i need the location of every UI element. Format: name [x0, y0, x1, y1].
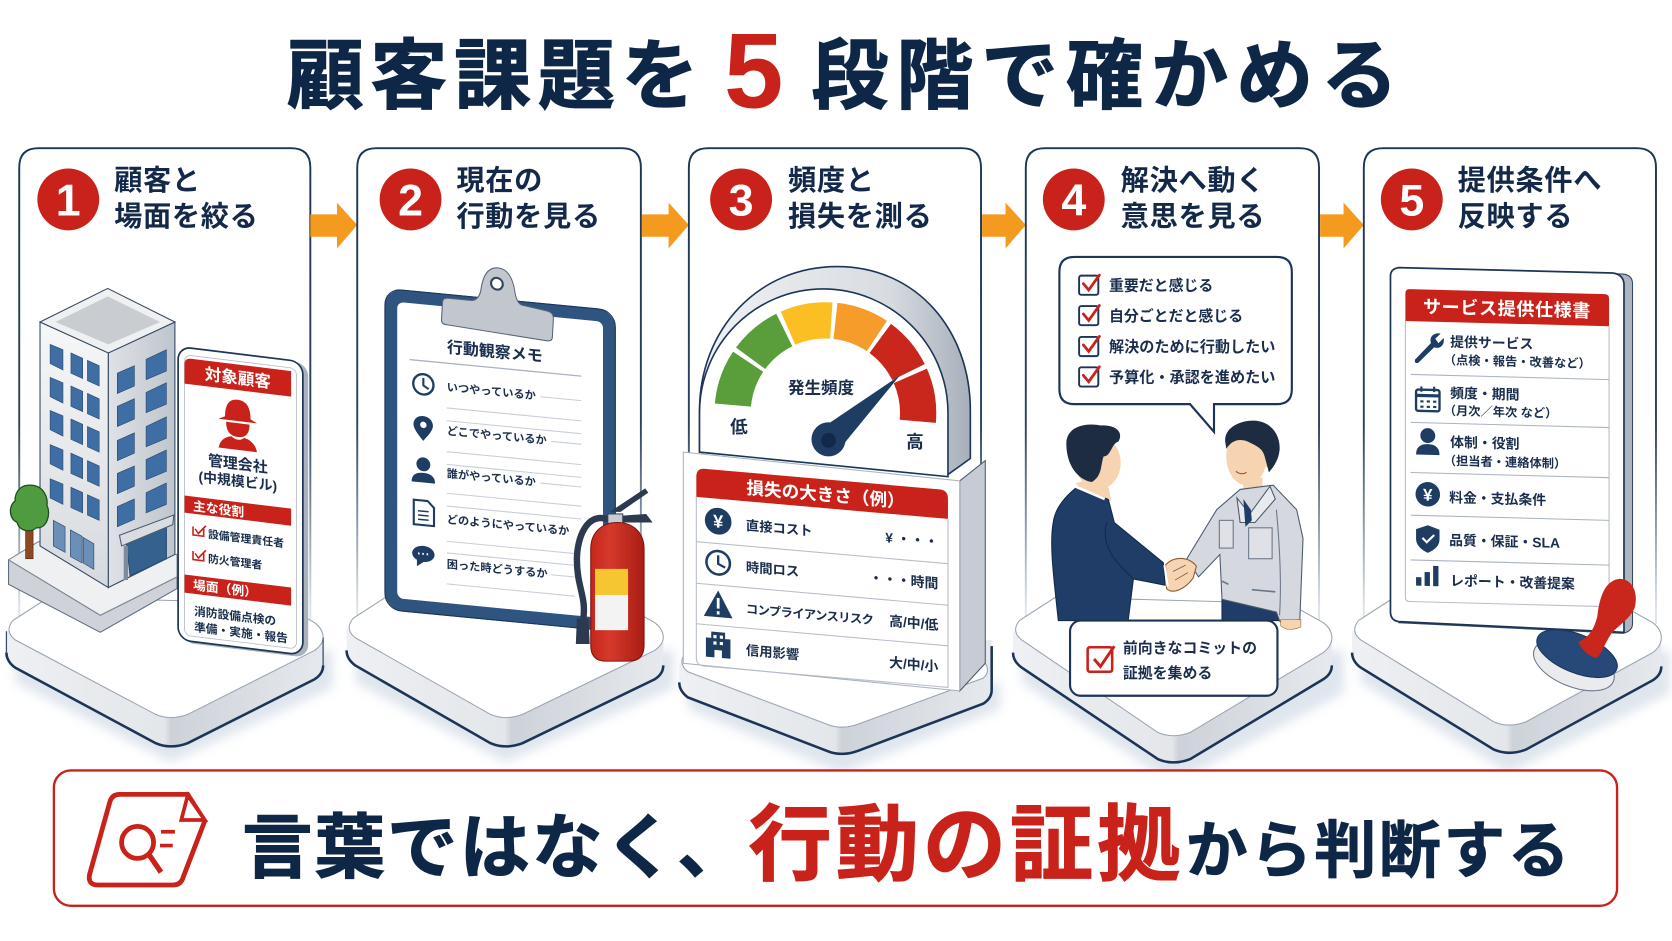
- arrow 4: [1320, 203, 1364, 248]
- gauge: 発生頻度: 低: [730, 417, 748, 437]
- card: 対象顧客: 防火管理者: [208, 551, 262, 572]
- heading 1: 場面を絞る: [114, 200, 259, 232]
- row: 料金・支払条件: ¥: [1423, 486, 1433, 505]
- row: 体制・役割: 体制・役割: [1450, 434, 1519, 452]
- row: 直接コスト: 直接コスト: [746, 517, 813, 539]
- heading 4: [1121, 164, 1265, 232]
- row: 料金・支払条件: 料金・支払条件: [1449, 489, 1546, 508]
- spec sheet: サービス提供仕様書: [1423, 296, 1590, 321]
- row: 信用影響: [706, 631, 938, 677]
- banner: bottom message: 言葉ではなく、: [242, 808, 747, 887]
- row: どのように: [414, 500, 575, 565]
- gauge: 発生頻度: 高: [906, 432, 924, 452]
- row: コンプライアンスリスク: [704, 589, 938, 636]
- row: 頻度・期間: [1416, 384, 1557, 421]
- card: 対象顧客: 対象顧客: [205, 364, 271, 392]
- step number 3: [710, 168, 772, 230]
- speech bubble checklist: [1059, 257, 1292, 432]
- step number 3: 3: [729, 175, 754, 225]
- card: 対象顧客: 主な役割: [193, 498, 244, 520]
- row: 時間ロス: [706, 550, 938, 594]
- title: [287, 11, 1398, 131]
- row: 誰が: [412, 456, 581, 519]
- row: 直接コスト: [705, 507, 938, 554]
- hands: [1164, 558, 1196, 591]
- table: 損失の大きさ: [683, 452, 985, 691]
- step number 2: 2: [398, 175, 423, 225]
- heading 1: 顧客と: [114, 164, 201, 196]
- platform 4: [1013, 597, 1344, 784]
- card: 対象顧客: 設備管理責任者: [208, 527, 284, 550]
- gauge: 発生頻度: 発生頻度: [788, 378, 855, 397]
- row: 提供サービス: 提供サービス: [1450, 334, 1533, 352]
- row: 困った時: [412, 545, 575, 596]
- card: 対象顧客: (中規模ビル): [199, 468, 277, 494]
- icon: worker: [219, 397, 257, 452]
- heading 5: 提供条件へ: [1458, 164, 1602, 196]
- icon: fire extinguisher: [576, 488, 653, 661]
- platform 2: [347, 595, 674, 762]
- card: 対象顧客: 消防設備点検の: [194, 604, 276, 628]
- spec sheet: [1390, 268, 1633, 633]
- icon: building: [9, 288, 177, 632]
- heading 3: 損失を測る: [788, 200, 932, 232]
- speech bubble checklist: 自分ごとだと感じる: [1109, 307, 1243, 325]
- step number 1: [37, 168, 99, 230]
- heading 2: 現在の: [456, 164, 543, 196]
- row: 信用影響: 信用影響: [746, 642, 799, 662]
- speech bubble checklist: 重要だと感じる: [1109, 277, 1213, 295]
- row: レポート・改善提案: レポート・改善提案: [1450, 573, 1575, 592]
- card: 対象顧客: 管理会社: [208, 451, 268, 477]
- row: コンプライアンスリスク: 高/中/低: [889, 613, 938, 633]
- card: 対象顧客: [178, 347, 308, 658]
- step number 2: [380, 168, 441, 230]
- gauge: 発生頻度: [700, 267, 970, 477]
- title: 段階で確かめる: [811, 34, 1398, 119]
- row: 頻度・期間: 頻度・期間: [1450, 385, 1519, 403]
- panel 4: 解決へ動く意思を見る: [1013, 148, 1344, 784]
- row: 直接コスト: ¥: [713, 511, 724, 532]
- callout: 前向きなコミット: 証拠を集める: [1123, 664, 1212, 682]
- arrow 1: [310, 203, 357, 248]
- callout: 前向きなコミット: [1070, 621, 1277, 696]
- heading 5: [1458, 164, 1602, 232]
- person in suit: [1052, 424, 1165, 621]
- panel 2: 現在の行動を見る: [347, 148, 674, 762]
- row: 困った時: 困った時どうするか: [447, 557, 548, 581]
- heading 3: [788, 164, 932, 232]
- row: 提供サービス: [1415, 333, 1591, 371]
- card: 対象顧客: 準備・実施・報告: [194, 620, 288, 646]
- title: 顧客課題を: [287, 34, 698, 119]
- row: 直接コスト: ¥ ・・・: [885, 529, 938, 550]
- callout: 前向きなコミット: 前向きなコミットの: [1123, 639, 1257, 657]
- clip: [441, 262, 553, 341]
- arrow 3: [982, 203, 1026, 248]
- speech bubble checklist: 解決のために行動したい: [1109, 338, 1275, 356]
- row: いつ: いつやっているか: [447, 381, 536, 402]
- row: 信用影響: 大/中/小: [889, 654, 938, 675]
- panel 3: 頻度と損失を測る: [679, 148, 1000, 773]
- row: どのように: どのようにやっているか: [447, 512, 569, 538]
- heading 2: 行動を見る: [456, 200, 601, 232]
- icon: tree: [10, 485, 49, 559]
- illustration: handshake: [1052, 421, 1303, 629]
- row: 提供サービス: （点検・報告・改善など）: [1444, 352, 1591, 371]
- row: 体制・役割: （担当者・連絡体制）: [1444, 453, 1566, 471]
- row: どこで: [413, 415, 581, 477]
- banner: bottom message: [54, 770, 1617, 906]
- row: 体制・役割: [1416, 428, 1566, 471]
- row: どこで: どこでやっているか: [447, 424, 547, 447]
- arrow 2: [642, 203, 689, 248]
- row: 頻度・期間: （月次／年次 など）: [1444, 403, 1557, 421]
- step number 1: 1: [56, 175, 81, 225]
- heading 5: 反映する: [1458, 200, 1573, 232]
- row: 時間ロス: 時間ロス: [746, 559, 799, 579]
- needle: [811, 375, 900, 456]
- row: 料金・支払条件: [1416, 482, 1546, 510]
- heading 1: [114, 164, 259, 232]
- platform 5: [1352, 597, 1670, 773]
- title: 5: [724, 11, 783, 131]
- row: コンプライアンスリスク: コンプライアンスリスク: [746, 602, 874, 627]
- row: 品質・保証・SLA: 品質・保証・SLA: [1449, 532, 1560, 551]
- row: 品質・保証・SLA: [1416, 525, 1560, 556]
- step number 5: [1381, 168, 1443, 230]
- speech bubble checklist: 予算化・承認を進めたい: [1109, 368, 1275, 386]
- row: いつ: [413, 373, 581, 434]
- card: 対象顧客: 場面（例）: [193, 577, 257, 600]
- table: 損失の大きさ: 損失の大きさ（例）: [746, 478, 905, 512]
- step number 4: 4: [1061, 175, 1086, 225]
- person in work jacket: [1187, 421, 1303, 629]
- icon: document with magnifier: [89, 794, 205, 885]
- platform 1: [6, 597, 333, 762]
- step number 5: 5: [1399, 175, 1424, 225]
- heading 4: 意思を見る: [1121, 200, 1265, 232]
- step number 4: [1043, 168, 1105, 230]
- heading 3: 頻度と: [788, 164, 875, 196]
- row: 時間ロス: ・・・時間: [869, 569, 938, 591]
- panel 5: 提供条件へ反映する: [1352, 148, 1670, 773]
- heading 2: [456, 164, 601, 232]
- platform 3: [679, 640, 1000, 773]
- row: レポート・改善提案: [1416, 565, 1575, 592]
- clipboard: 行動観察メモ: 行動観察メモ: [447, 338, 543, 366]
- panel 1: 顧客と場面を絞る: [6, 148, 333, 762]
- heading 4: 解決へ動く: [1121, 164, 1265, 196]
- icon: stamp: [1526, 579, 1636, 701]
- clipboard: 行動観察メモ: [385, 257, 615, 632]
- row: 誰が: 誰がやっているか: [447, 466, 536, 489]
- banner: bottom message: から判断する: [1186, 817, 1570, 886]
- banner: bottom message: 行動の証拠: [749, 798, 1180, 891]
